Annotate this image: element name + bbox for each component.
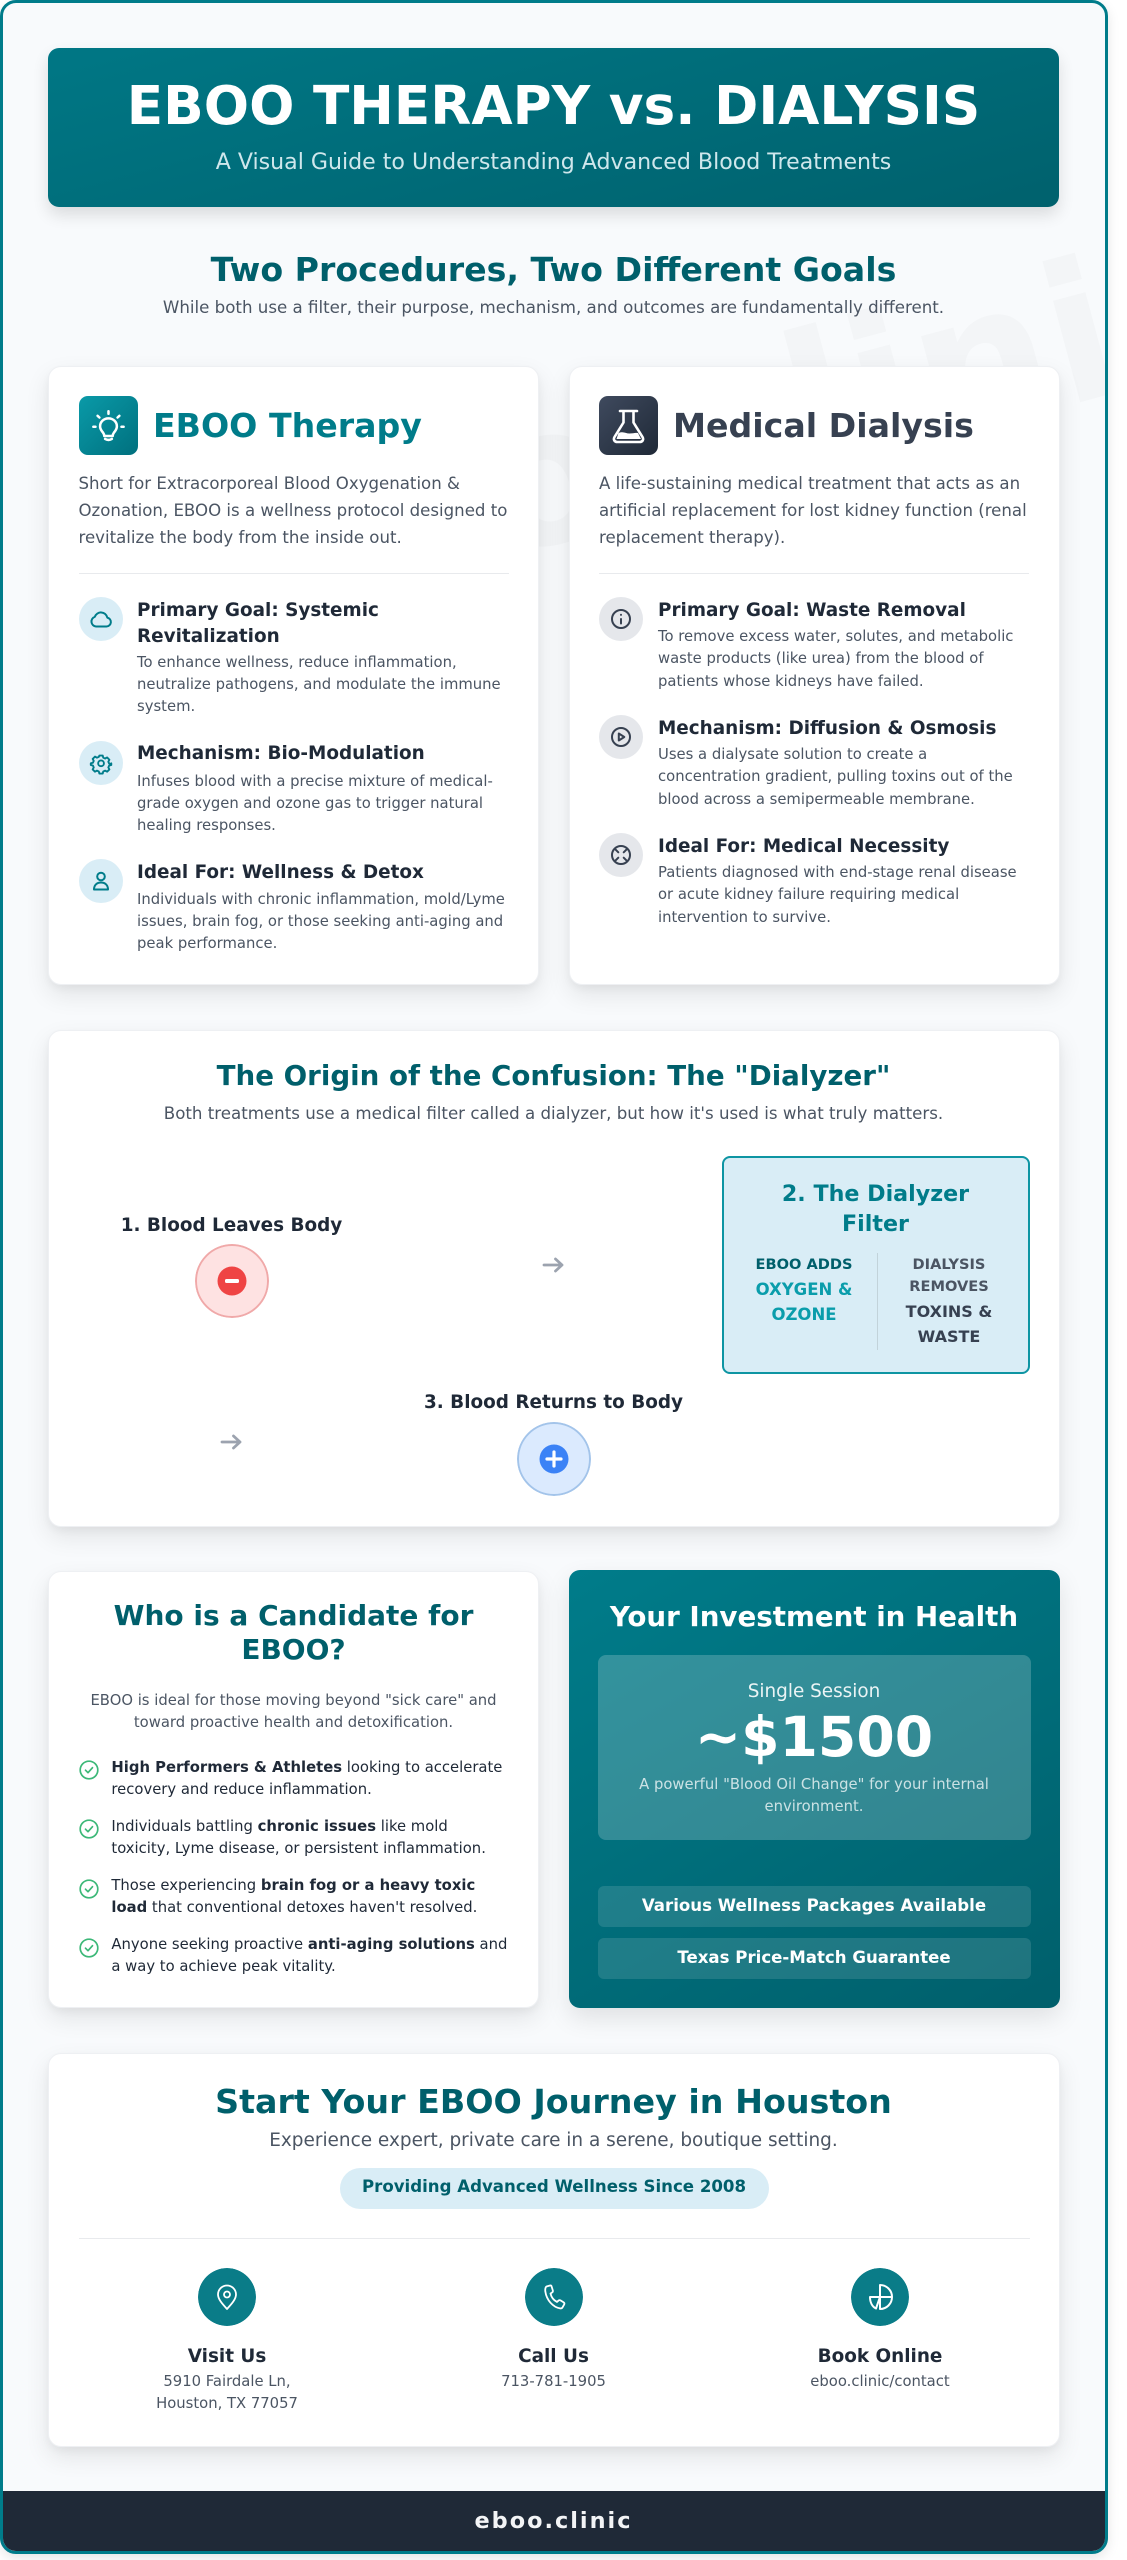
header banner — [48, 48, 1059, 207]
icon: flask — [599, 396, 658, 455]
filter title: 2. The Dialyzer — [782, 1181, 969, 1207]
subtitle: A Visual Guide to Understanding Advanced Blood Treatments — [216, 149, 891, 175]
section subheading: While both use a filter, their purpose, mechanism, and outcomes are fundamentally different. — [163, 298, 944, 317]
feature text: peak performance. — [137, 935, 277, 952]
step 3: blood returns to body — [424, 1392, 683, 1496]
item text: a way to achieve peak vitality. — [111, 1958, 336, 1975]
card description: replacement therapy). — [599, 528, 785, 547]
feature text — [658, 746, 1013, 808]
feature text: Uses a dialysate solution to create a — [658, 746, 927, 763]
icon: check — [79, 1938, 99, 1958]
icon: info — [599, 597, 643, 641]
feature text: issues, brain fog, or those seeking anti-aging and — [137, 913, 503, 930]
feature title: Mechanism: Bio-Modulation — [137, 743, 425, 764]
pill: packages — [598, 1886, 1031, 1927]
feature text — [136, 654, 501, 715]
filter title — [782, 1181, 969, 1237]
footer text: eboo.clinic — [474, 2508, 632, 2534]
list item 3 — [79, 1877, 477, 1916]
icon: cloud — [78, 597, 122, 641]
icon: pie — [851, 2268, 909, 2326]
pill: price match — [598, 1938, 1031, 1979]
step label: 3. Blood Returns to Body — [424, 1392, 683, 1413]
contact: call — [455, 2268, 655, 2398]
EBOO adds column — [755, 1256, 853, 1324]
item text — [111, 1818, 486, 1857]
card description: A life-sustaining medical treatment that acts as an — [599, 474, 1020, 493]
feature text: To enhance wellness, reduce inflammation, — [137, 654, 457, 671]
dialyzer filter box — [722, 1156, 1030, 1374]
feature title: Primary Goal: Systemic — [137, 600, 379, 621]
value: OXYGEN & — [756, 1280, 852, 1299]
description — [90, 1692, 497, 1731]
card title: EBOO Therapy — [153, 406, 422, 445]
badge: Providing Advanced Wellness Since 2008 — [362, 2177, 746, 2196]
pill: packages: Various Wellness Packages Available — [642, 1896, 986, 1915]
label: Call Us — [518, 2346, 589, 2367]
url: eboo.clinic/contact — [810, 2373, 950, 2390]
subheading: Experience expert, private care in a serene, boutique setting. — [269, 2130, 838, 2151]
panel: EBOO therapy — [48, 366, 539, 985]
feature: mechanism — [79, 741, 493, 834]
feature text: To remove excess water, solutes, and metabolic — [658, 628, 1013, 645]
heading: Start Your EBOO Journey in Houston — [215, 2082, 892, 2121]
icon: person — [78, 859, 122, 903]
item text: load that conventional detoxes haven't resolved. — [111, 1899, 477, 1916]
icon: gear — [78, 741, 122, 785]
price note: A powerful "Blood Oil Change" for your internal — [639, 1776, 989, 1793]
feature text — [137, 773, 493, 834]
price note — [639, 1774, 989, 1819]
item text: High Performers & Athletes looking to accelerate — [111, 1759, 502, 1776]
step label: 1. Blood Leaves Body — [121, 1215, 342, 1236]
footer — [3, 2491, 1105, 2551]
item text: Anyone seeking proactive anti-aging solutions and — [111, 1936, 507, 1953]
feature text — [658, 864, 1017, 926]
feature text — [137, 891, 505, 952]
list item 4 — [79, 1936, 507, 1975]
icon: plus circle — [517, 1422, 591, 1496]
feature title — [137, 600, 379, 647]
step 1: blood leaves body — [121, 1215, 342, 1318]
card description: artificial replacement for lost kidney function (renal — [599, 501, 1027, 520]
icon: check — [79, 1879, 99, 1899]
feature text: Individuals with chronic inflammation, mold/Lyme — [137, 891, 505, 908]
label: Book Online — [818, 2346, 942, 2367]
subheading: Both treatments use a medical filter called a dialyzer, but how it's used is what truly matters. — [164, 1104, 943, 1123]
contact: visit — [130, 2268, 325, 2418]
feature: mechanism — [599, 715, 1013, 808]
title: EBOO THERAPY vs. DIALYSIS — [127, 75, 980, 137]
item text: Those experiencing brain fog or a heavy toxic — [111, 1877, 475, 1894]
card description: revitalize the body from the inside out. — [78, 528, 402, 547]
feature text: neutralize pathogens, and modulate the immune — [137, 676, 501, 693]
feature text: healing responses. — [137, 817, 276, 834]
feature text: intervention to survive. — [658, 909, 831, 926]
icon: lightbulb — [78, 396, 138, 455]
feature text: patients whose kidneys have failed. — [658, 673, 924, 690]
icon: map pin — [198, 2268, 256, 2326]
label: EBOO ADDS — [755, 1256, 853, 1273]
feature title: Mechanism: Diffusion & Osmosis — [658, 718, 996, 739]
card description — [599, 474, 1027, 547]
feature text: waste products (like urea) from the blood of — [658, 650, 984, 667]
feature text: system. — [137, 698, 195, 715]
contact: book — [780, 2268, 980, 2398]
heading — [114, 1599, 474, 1666]
icon: check — [79, 1760, 99, 1780]
price note: environment. — [765, 1798, 863, 1815]
feature title: Primary Goal: Waste Removal — [658, 600, 966, 621]
item text: toxicity, Lyme disease, or persistent inflammation. — [111, 1840, 486, 1857]
arrow: to filter — [542, 1258, 564, 1272]
description: toward proactive health and detoxification. — [134, 1714, 453, 1731]
phone number: 713-781-1905 — [501, 2373, 606, 2390]
card description: Ozonation, EBOO is a wellness protocol designed to — [78, 501, 507, 520]
value: TOXINS & — [906, 1302, 992, 1321]
panel: call to action — [48, 2053, 1060, 2447]
panel: investment — [569, 1570, 1060, 2008]
feature text: grade oxygen and ozone gas to trigger natural — [137, 795, 483, 812]
feature: primary goal — [79, 597, 501, 715]
item text: Individuals battling chronic issues like mold — [111, 1818, 448, 1835]
value — [906, 1302, 992, 1346]
icon: check — [79, 1819, 99, 1839]
feature text: Infuses blood with a precise mixture of medical- — [137, 773, 493, 790]
feature text: or acute kidney failure requiring medical — [658, 886, 959, 903]
filter title: Filter — [842, 1211, 909, 1237]
arrow: to return — [220, 1434, 242, 1450]
price box — [598, 1655, 1031, 1840]
feature: ideal for — [79, 859, 505, 952]
icon: phone — [525, 2268, 583, 2326]
section heading: Two Procedures, Two Different Goals — [211, 250, 896, 289]
label: DIALYSIS — [913, 1256, 985, 1273]
feature text: concentration gradient, pulling toxins out of the — [658, 768, 1013, 785]
card description — [78, 474, 507, 547]
icon: play circle — [599, 715, 643, 759]
price label: Single Session — [748, 1681, 880, 1702]
address: Houston, TX 77057 — [156, 2395, 298, 2412]
feature text: Patients diagnosed with end-stage renal disease — [658, 864, 1017, 881]
heading: The Origin of the Confusion: The "Dialyzer" — [217, 1059, 890, 1092]
icon: support ring — [599, 833, 643, 877]
feature: ideal for — [599, 833, 1017, 926]
value: OZONE — [771, 1305, 837, 1324]
heading: Your Investment in Health — [610, 1600, 1018, 1633]
label: REMOVES — [909, 1278, 989, 1295]
item text — [111, 1934, 507, 1978]
pill: price match: Texas Price-Match Guarantee — [677, 1948, 951, 1967]
item text: recovery and reduce inflammation. — [111, 1781, 372, 1798]
label: Visit Us — [188, 2346, 266, 2367]
feature title: Ideal For: Medical Necessity — [658, 836, 949, 857]
heading: EBOO? — [241, 1633, 346, 1666]
item text — [111, 1877, 477, 1916]
value — [756, 1280, 852, 1324]
feature title: Ideal For: Wellness & Detox — [137, 862, 424, 883]
card title: Medical Dialysis — [673, 406, 974, 445]
feature text: blood across a semipermeable membrane. — [658, 791, 975, 808]
panel: origin of the confusion — [48, 1030, 1060, 1527]
heading: Who is a Candidate for — [114, 1599, 473, 1632]
address — [156, 2371, 298, 2416]
price: ~$1500 — [695, 1706, 933, 1770]
list item 2 — [79, 1818, 486, 1857]
list item 1 — [79, 1759, 502, 1798]
address: 5910 Fairdale Ln, — [163, 2373, 291, 2390]
description: EBOO is ideal for those moving beyond "sick care" and — [90, 1692, 497, 1709]
feature: primary goal — [599, 597, 1013, 690]
badge — [340, 2168, 769, 2209]
item text — [111, 1759, 502, 1798]
panel: candidate — [48, 1571, 539, 2008]
panel: medical dialysis — [569, 366, 1060, 985]
icon: minus circle — [195, 1244, 269, 1318]
value: WASTE — [918, 1327, 980, 1346]
feature text — [658, 628, 1013, 690]
card description: Short for Extracorporeal Blood Oxygenation & — [78, 474, 460, 493]
feature title: Revitalization — [137, 626, 280, 647]
label — [909, 1256, 989, 1295]
dialysis removes column — [906, 1256, 992, 1346]
